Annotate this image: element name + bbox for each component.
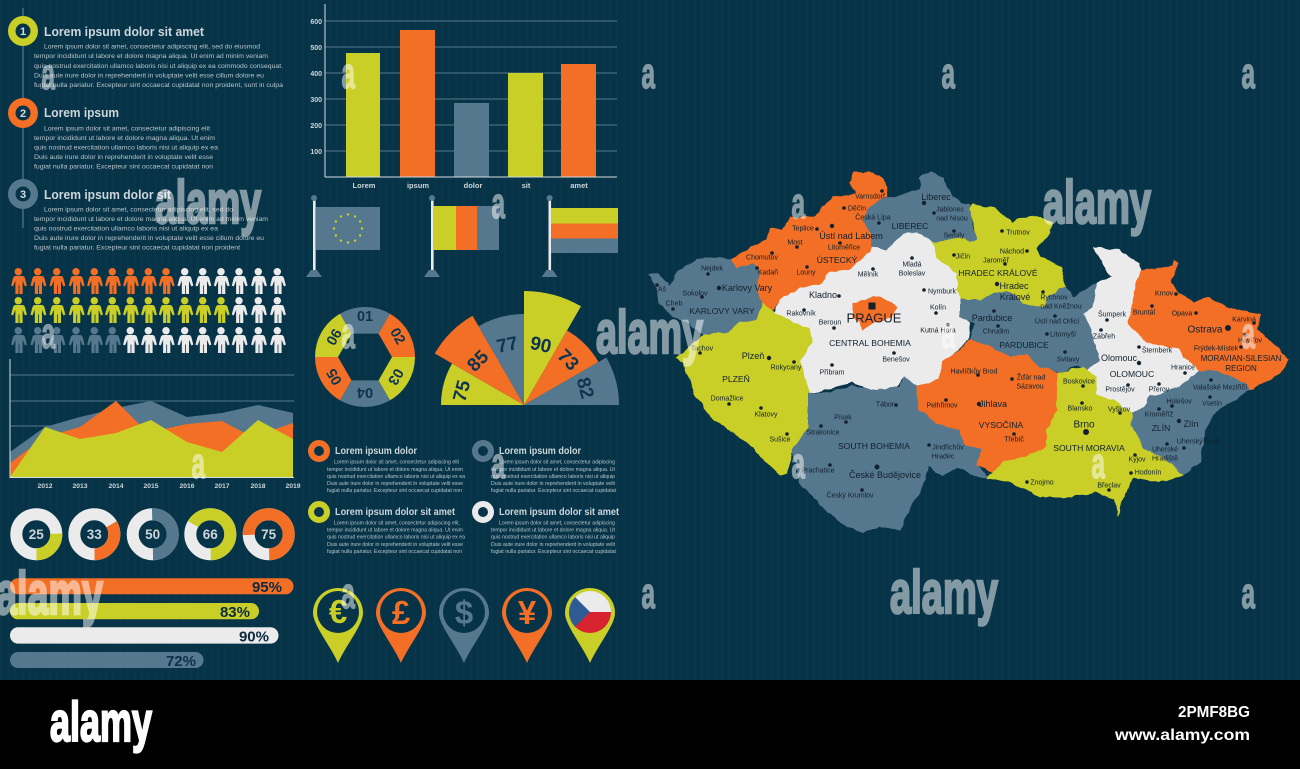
info block: slate: Lorem ipsum dolor	[499, 446, 581, 457]
ring chart: 06	[324, 327, 346, 348]
map labels: cities and regions: Jablonec	[936, 206, 965, 214]
info block: white: Lorem ipsum dolor sit amet	[499, 507, 620, 518]
ring chart: 01	[357, 309, 373, 325]
map labels: cities and regions: Boskovice	[1063, 378, 1095, 386]
fan chart: 85	[463, 346, 494, 376]
region: Central Bohemia	[775, 232, 970, 392]
info block: yellow: Lorem ipsum dolor sit amet, consectetur adipiscing elit,	[334, 520, 460, 526]
map labels: cities and regions: Králové	[1000, 292, 1030, 302]
fan chart: 82	[572, 375, 597, 401]
bar chart: 500	[310, 45, 322, 52]
map labels: cities and regions: Náchod	[1000, 248, 1024, 256]
map labels: cities and regions: Třebíč	[1004, 436, 1024, 444]
map labels: cities and regions: LIBEREC	[892, 221, 928, 231]
region: South Moravia	[987, 367, 1183, 515]
pin: dollar	[439, 588, 489, 663]
pin: yen: ¥	[518, 594, 537, 631]
map labels: cities and regions: nad Kněžnou	[1040, 304, 1082, 310]
watermark overlays: a	[942, 49, 955, 98]
text block 1: Duis aute irure dolor in reprehenderit in voluptate velit esse cillum dolore eu	[34, 72, 264, 79]
map labels: cities and regions: Karlovy Vary	[722, 283, 773, 293]
donut charts: 50	[145, 527, 160, 542]
map labels: cities and regions: Hradec	[932, 454, 955, 460]
map labels: cities and regions: Litomyšl	[1050, 332, 1076, 338]
ring chart: 04	[357, 384, 373, 400]
map labels: cities and regions: Chomutov	[746, 254, 778, 262]
info block: orange: quis nostrud exercitation ullamco laboris nisi ut aliquip ex ea	[327, 474, 466, 480]
map labels: cities and regions: ÚSTECKÝ	[817, 255, 858, 265]
map labels: cities and regions: Děčín	[848, 206, 866, 212]
text block 1	[8, 8, 283, 228]
map labels: cities and regions: Semily	[943, 232, 965, 240]
area chart	[10, 359, 301, 490]
info block: yellow	[311, 504, 466, 555]
map labels: cities and regions: Uherský Brod	[1177, 438, 1219, 446]
watermark overlays: a	[642, 49, 655, 98]
map labels: cities and regions: Znojmo	[1030, 480, 1054, 486]
map labels: cities and regions: Holešov	[1166, 398, 1192, 406]
map labels: cities and regions: CENTRAL BOHEMIA	[829, 338, 911, 348]
map labels: cities and regions: Ostrava	[1187, 324, 1223, 336]
flag: EU	[306, 195, 380, 277]
donut charts: 75	[261, 527, 277, 542]
map labels: cities and regions: Rychnov	[1040, 294, 1068, 302]
text block 2: Duis aute irure dolor in reprehenderit in voluptate velit esse	[34, 154, 213, 161]
map labels: cities and regions: OLOMOUC	[1110, 369, 1154, 379]
region: Zlin	[1132, 370, 1250, 475]
text block 3: Duis aute irure dolor in reprehenderit in voluptate velit esse cillum dolore eu	[34, 235, 264, 242]
map labels: cities and regions: Krnov	[1155, 290, 1174, 298]
info block: white: Duis aute irure dolor in reprehenderit in voluptate velit	[491, 542, 615, 548]
info block: slate: Lorem ipsum dolor sit amet, consectetur adipiscing	[499, 460, 615, 466]
area chart: 2016	[179, 483, 195, 490]
pin: Czech flag	[565, 588, 615, 663]
map labels: cities and regions: Jihlava	[979, 399, 1007, 409]
bar chart: Lorem	[353, 181, 376, 190]
map labels: cities and regions: Česká Lípa	[855, 212, 891, 222]
map labels: cities and regions: HRADEC KRÁLOVÉ	[958, 268, 1038, 278]
pin: yen	[502, 588, 552, 663]
watermark overlays: alamy	[890, 559, 998, 626]
region: Ustecky	[732, 172, 887, 310]
watermark overlays: alamy	[0, 560, 103, 627]
bar chart: 100	[310, 149, 322, 156]
progress bars: 83%	[220, 604, 250, 621]
watermark overlays: alamy	[596, 299, 703, 366]
pictogram: people rows	[11, 268, 286, 353]
watermark overlays: alamy	[1043, 169, 1151, 236]
flag: vertical tricolour	[424, 195, 499, 277]
map labels: cities and regions: Olomouc	[1101, 353, 1138, 363]
info block: slate: Duis aute irure dolor in reprehenderit in voluptate velit	[491, 481, 615, 487]
map labels: cities and regions: Uherské	[1152, 446, 1178, 454]
map labels: cities and regions: Hradiště	[1152, 456, 1178, 462]
map labels: cities and regions: Litoměřice	[828, 244, 860, 252]
map labels: cities and regions: Rakovník	[786, 310, 816, 318]
progress bars: 72%	[166, 653, 196, 670]
pin: dollar: $	[455, 594, 473, 631]
area chart: 2018	[250, 483, 266, 490]
map labels: cities and regions: Louny	[796, 270, 816, 276]
bar chart: sit	[522, 181, 531, 190]
map labels: cities and regions: Varnsdorf	[855, 194, 885, 200]
map labels: cities and regions: Vsetín	[1202, 400, 1222, 408]
pin: pound: £	[392, 594, 411, 631]
watermark overlays: a	[492, 179, 505, 228]
map labels: cities and regions: MORAVIAN-SILESIAN	[1201, 354, 1282, 363]
info block: white: quis nostrud exercitation ullamco laboris nisi ut aliquip	[491, 535, 615, 541]
watermark overlays: a	[42, 50, 55, 99]
donut charts: 33	[87, 527, 102, 542]
map labels: cities and regions: Kladno	[809, 290, 837, 300]
map labels: cities and regions: Hranice	[1171, 364, 1195, 372]
ring chart: 03	[384, 366, 406, 387]
map labels: cities and regions: Kutná Hora	[920, 328, 956, 334]
text block 1: Lorem ipsum dolor sit amet	[44, 25, 205, 39]
map labels: cities and regions: Rokycany	[771, 364, 802, 372]
map labels: cities and regions	[655, 189, 1282, 499]
map labels: cities and regions: Benešov	[882, 356, 910, 364]
donut charts	[16, 507, 289, 562]
info block: yellow: Lorem ipsum dolor sit amet	[335, 507, 456, 518]
map labels: cities and regions: ZLÍN	[1152, 423, 1170, 433]
watermark overlays: a	[792, 439, 805, 488]
text block 1: tempor incididunt ut labore et dolore magna aliqua. Ut enim ad minim veniam	[34, 53, 269, 60]
map labels: cities and regions: Sázavou	[1016, 384, 1044, 390]
info block: yellow: quis nostrud exercitation ullamco laboris nisi ut aliquip ex ea	[327, 535, 466, 541]
map labels: cities and regions: Jičín	[956, 254, 970, 260]
map labels: cities and regions: Písek	[834, 414, 852, 422]
map labels: cities and regions: SOUTH MORAVIA	[1053, 443, 1125, 453]
info block: orange: Lorem ipsum dolor	[335, 446, 417, 457]
map labels: cities and regions: Strakonice	[806, 430, 840, 436]
region: Vysocina	[917, 340, 1058, 472]
info block: yellow: tempor incididunt ut labore et dolore magna aliqua. Ut enim	[327, 528, 463, 534]
info block: white: fugiat nulla pariatur. Excepteur sint occaecat cupidatat	[491, 549, 616, 555]
info block: white	[475, 504, 620, 555]
map labels: cities and regions: Tábor	[876, 402, 895, 408]
map labels: cities and regions: nad Nisou	[936, 216, 968, 222]
watermark overlays: alamy	[155, 169, 261, 236]
area chart: 2015	[143, 483, 159, 490]
fan chart: 73	[553, 345, 583, 375]
map labels: cities and regions: Klatovy	[755, 412, 778, 418]
watermark overlays	[0, 49, 1255, 627]
map labels: cities and regions: Pardubice	[972, 313, 1012, 323]
text block 3: 3	[20, 189, 26, 201]
text block 3: Lorem ipsum dolor sit amet, consectetur adipiscing elit, sed do	[44, 206, 233, 214]
map labels: cities and regions: České Budějovice	[849, 470, 921, 480]
text block 2: Lorem ipsum	[44, 106, 119, 120]
map labels: cities and regions: Kolín	[930, 304, 946, 312]
region: Plzen	[677, 303, 813, 475]
map labels: cities and regions: Karviná	[1232, 316, 1256, 324]
region: Hradec Kralove	[933, 205, 1065, 308]
text block 3: fugiat nulla pariatur. Excepteur sint occaecat cupidatat non proident	[34, 244, 240, 252]
footer image id: 2PMF8BG	[1178, 704, 1250, 721]
map labels: cities and regions: Valašské Meziříčí	[1193, 384, 1247, 392]
info block: yellow: Duis aute irure dolor in reprehenderit in voluptate velit esse	[327, 542, 463, 548]
info block: orange: Lorem ipsum dolor sit amet, consectetur adipiscing elit	[334, 460, 459, 466]
map labels: cities and regions: Liberec	[921, 192, 951, 202]
map of Czech Republic	[650, 172, 1288, 532]
info block: orange: fugiat nulla pariatur. Excepteur sint occaecat cupidatat non	[327, 488, 462, 494]
watermark overlays: a	[1242, 309, 1255, 358]
map labels: cities and regions: Prostějov	[1105, 386, 1135, 394]
bar chart	[310, 4, 617, 190]
text block 3	[8, 179, 269, 252]
map labels: cities and regions: PLZEŇ	[722, 374, 750, 384]
map labels: cities and regions: Svitavy	[1057, 356, 1080, 364]
info block: orange: tempor incididunt ut labore et dolore magna aliqua. Ut enim	[327, 467, 463, 473]
area chart: 2017	[214, 483, 230, 490]
map labels: cities and regions: Trutnov	[1006, 230, 1030, 236]
watermark overlays: a	[942, 309, 955, 358]
watermark overlays: a	[342, 49, 355, 98]
map labels: cities and regions: Jaroměř	[983, 258, 1009, 264]
map labels: cities and regions: Žďár nad	[1017, 372, 1045, 382]
info block: yellow: fugiat nulla pariatur. Excepteur sint occaecat cupidatat non	[327, 549, 462, 555]
bar chart: 400	[310, 71, 322, 78]
region: South Bohemia	[793, 378, 987, 532]
text block 1: fugiat nulla pariatur. Excepteur sint occaecat cupidatat non proident, sunt in culpa	[34, 82, 283, 89]
fan chart: 75	[450, 378, 475, 404]
map labels: cities and regions: Šternberk	[1142, 346, 1173, 354]
map labels: cities and regions: Kadaň	[758, 270, 778, 276]
text block 2	[8, 98, 218, 170]
map labels: cities and regions: Zábřeh	[1093, 334, 1115, 340]
text block 2: 2	[20, 108, 26, 120]
fan chart: 77	[495, 333, 520, 358]
text block 2: quis nostrud exercitation ullamco laboris nisi ut aliquip ex ea	[34, 144, 218, 152]
text block 3: tempor incididunt ut labore et dolore magna aliqua. Ut enim ad minim veniam	[34, 216, 269, 223]
region: Olomouc	[1085, 248, 1200, 413]
map labels: cities and regions: Teplice	[792, 226, 814, 232]
map labels: cities and regions: Plzeň	[742, 351, 764, 361]
map labels: cities and regions: Český Krumlov	[826, 490, 874, 500]
donut charts: 66	[203, 527, 218, 542]
info block: slate: tempor incididunt ut labore et dolore magna aliqua. Ut	[491, 467, 615, 473]
info block: slate: quis nostrud exercitation ullamco laboris nisi ut aliquip	[491, 474, 615, 480]
map labels: cities and regions: Opava	[1172, 310, 1192, 318]
region: Karlovy Vary	[650, 257, 762, 335]
map labels: cities and regions: Aš	[658, 286, 667, 294]
map labels: cities and regions: Vyškov	[1108, 406, 1131, 414]
map labels: cities and regions: Bruntál	[1133, 310, 1156, 316]
text block 1: Lorem ipsum dolor sit amet, consectetur adipiscing elit, sed do eiusmod	[44, 44, 260, 50]
map labels: cities and regions: Sušice	[769, 436, 791, 444]
map labels: cities and regions: Ústí nad Orlicí	[1035, 316, 1079, 326]
map labels: cities and regions: Prachatice	[801, 468, 835, 474]
map labels: cities and regions: Most	[787, 240, 803, 246]
map labels: cities and regions: SOUTH BOHEMIA	[838, 441, 910, 451]
map labels: cities and regions: Frýdek-Místek	[1194, 346, 1239, 352]
map labels: cities and regions: Přerov	[1149, 386, 1170, 394]
map labels: cities and regions: Sokolov	[683, 290, 708, 298]
pin: euro	[313, 588, 363, 663]
map labels: cities and regions: Břeclav	[1097, 482, 1121, 490]
region: Liberec	[862, 173, 978, 250]
watermark overlays: a	[42, 309, 55, 358]
watermark overlays: a	[1242, 569, 1255, 618]
watermark overlays: a	[792, 179, 805, 228]
region: Moravian-Silesian	[1128, 260, 1288, 390]
area chart: 2012	[37, 483, 53, 490]
map labels: cities and regions: Blansko	[1068, 406, 1093, 412]
watermark overlays: a	[1242, 49, 1255, 98]
map labels: cities and regions: Havlíčkův Brod	[950, 368, 998, 376]
map labels: cities and regions: Havířov	[1238, 338, 1263, 344]
region: Prague	[853, 296, 895, 330]
info block: white: tempor incididunt ut labore et dolore magna aliqua. Ut	[491, 528, 615, 534]
map labels: cities and regions: Brno	[1073, 420, 1095, 430]
map labels: cities and regions: Mělník	[858, 272, 879, 278]
bar chart: dolor	[464, 181, 482, 190]
map labels: cities and regions: REGION	[1225, 364, 1257, 373]
area chart: 2013	[72, 483, 88, 490]
map labels: cities and regions: Boleslav	[899, 270, 926, 278]
map labels: cities and regions: Hodonín	[1135, 470, 1161, 476]
map labels: cities and regions: Domažlice	[711, 396, 743, 402]
map labels: cities and regions: Jindřichův	[932, 444, 964, 452]
map labels: cities and regions: Mladá	[902, 262, 922, 268]
map labels: cities and regions: Hradec	[999, 281, 1029, 291]
map labels: cities and regions: Příbram	[820, 370, 845, 376]
map labels: cities and regions: Šumperk	[1098, 310, 1127, 318]
map labels: cities and regions: Nymburk	[928, 288, 956, 296]
watermark overlays: a	[642, 569, 655, 618]
fan chart: 90	[528, 333, 553, 358]
text block 2: Lorem ipsum dolor sit amet, consectetur adipiscing elit	[44, 126, 210, 132]
area chart: 2014	[108, 483, 124, 490]
region: Pardubice	[960, 282, 1100, 372]
map labels: cities and regions: Kyjov	[1128, 456, 1146, 464]
bar chart: ipsum	[407, 181, 429, 190]
watermark overlays: a	[342, 569, 355, 618]
watermark overlays: a	[1092, 439, 1105, 488]
ring chart: 05	[324, 366, 346, 387]
map labels: cities and regions: Tachov	[691, 346, 714, 352]
text block 3: Lorem ipsum dolor sit	[44, 188, 172, 202]
map labels: cities and regions: Chrudim	[983, 328, 1009, 336]
progress bars: 95%	[252, 579, 282, 596]
text block 2: fugiat nulla pariatur. Excepteur sint occaecat cupidatat non	[34, 164, 213, 170]
map labels: cities and regions: VYSOČINA	[979, 420, 1023, 430]
map labels: cities and regions: Pelhřimov	[926, 402, 958, 410]
info block: white: Lorem ipsum dolor sit amet, consectetur adipiscing	[499, 520, 615, 526]
area chart: 2019	[285, 483, 301, 490]
map labels: cities and regions: PARDUBICE	[999, 340, 1049, 350]
map labels: cities and regions: PRAGUE	[847, 310, 902, 326]
map labels: cities and regions: Ústí nad Labem	[819, 231, 883, 241]
text block 1: quis nostrud exercitation ullamco laboris nisi ut aliquip ex ea commodo consequat.	[34, 63, 283, 70]
watermark overlays: a	[492, 439, 505, 488]
info block: slate: fugiat nulla pariatur. Excepteur sint occaecat cupidatat	[491, 488, 616, 494]
bar chart: 600	[310, 19, 322, 26]
map labels: cities and regions: Cheb	[666, 300, 682, 308]
map labels: cities and regions: Nejdek	[701, 266, 723, 272]
ring chart: 02	[386, 326, 408, 347]
bar chart: 300	[310, 97, 322, 104]
pin: euro: €	[329, 593, 347, 630]
bar chart: 200	[310, 123, 322, 130]
text block 3: quis nostrud exercitation ullamco laboris nisi ut aliquip ex ea	[34, 226, 218, 232]
footer logo: alamy	[50, 690, 152, 753]
watermark overlays: a	[192, 439, 205, 488]
fan chart	[435, 291, 619, 405]
info block: slate	[475, 443, 616, 494]
info block: orange	[311, 443, 466, 494]
flag: horizontal tricolour	[542, 195, 618, 277]
map labels: cities and regions: KARLOVY VARY	[689, 306, 755, 316]
map labels: cities and regions: Beroun	[819, 320, 841, 326]
map labels: cities and regions: Zlín	[1183, 419, 1199, 429]
ring chart	[315, 307, 415, 407]
pin: pound	[376, 588, 426, 663]
bar chart: amet	[570, 181, 588, 190]
map labels: cities and regions: Kroměříž	[1145, 412, 1174, 418]
footer website: www.alamy.com	[1114, 727, 1250, 744]
progress bars	[10, 578, 294, 670]
progress bars: 90%	[239, 628, 269, 646]
text block 2: tempor incididunt ut labore et dolore magna aliqua. Ut enim	[34, 135, 216, 142]
donut charts: 25	[29, 527, 44, 542]
watermark overlays: a	[342, 309, 355, 358]
text block 1: 1	[20, 26, 26, 38]
info block: orange: Duis aute irure dolor in reprehenderit in voluptate velit esse	[327, 481, 463, 487]
